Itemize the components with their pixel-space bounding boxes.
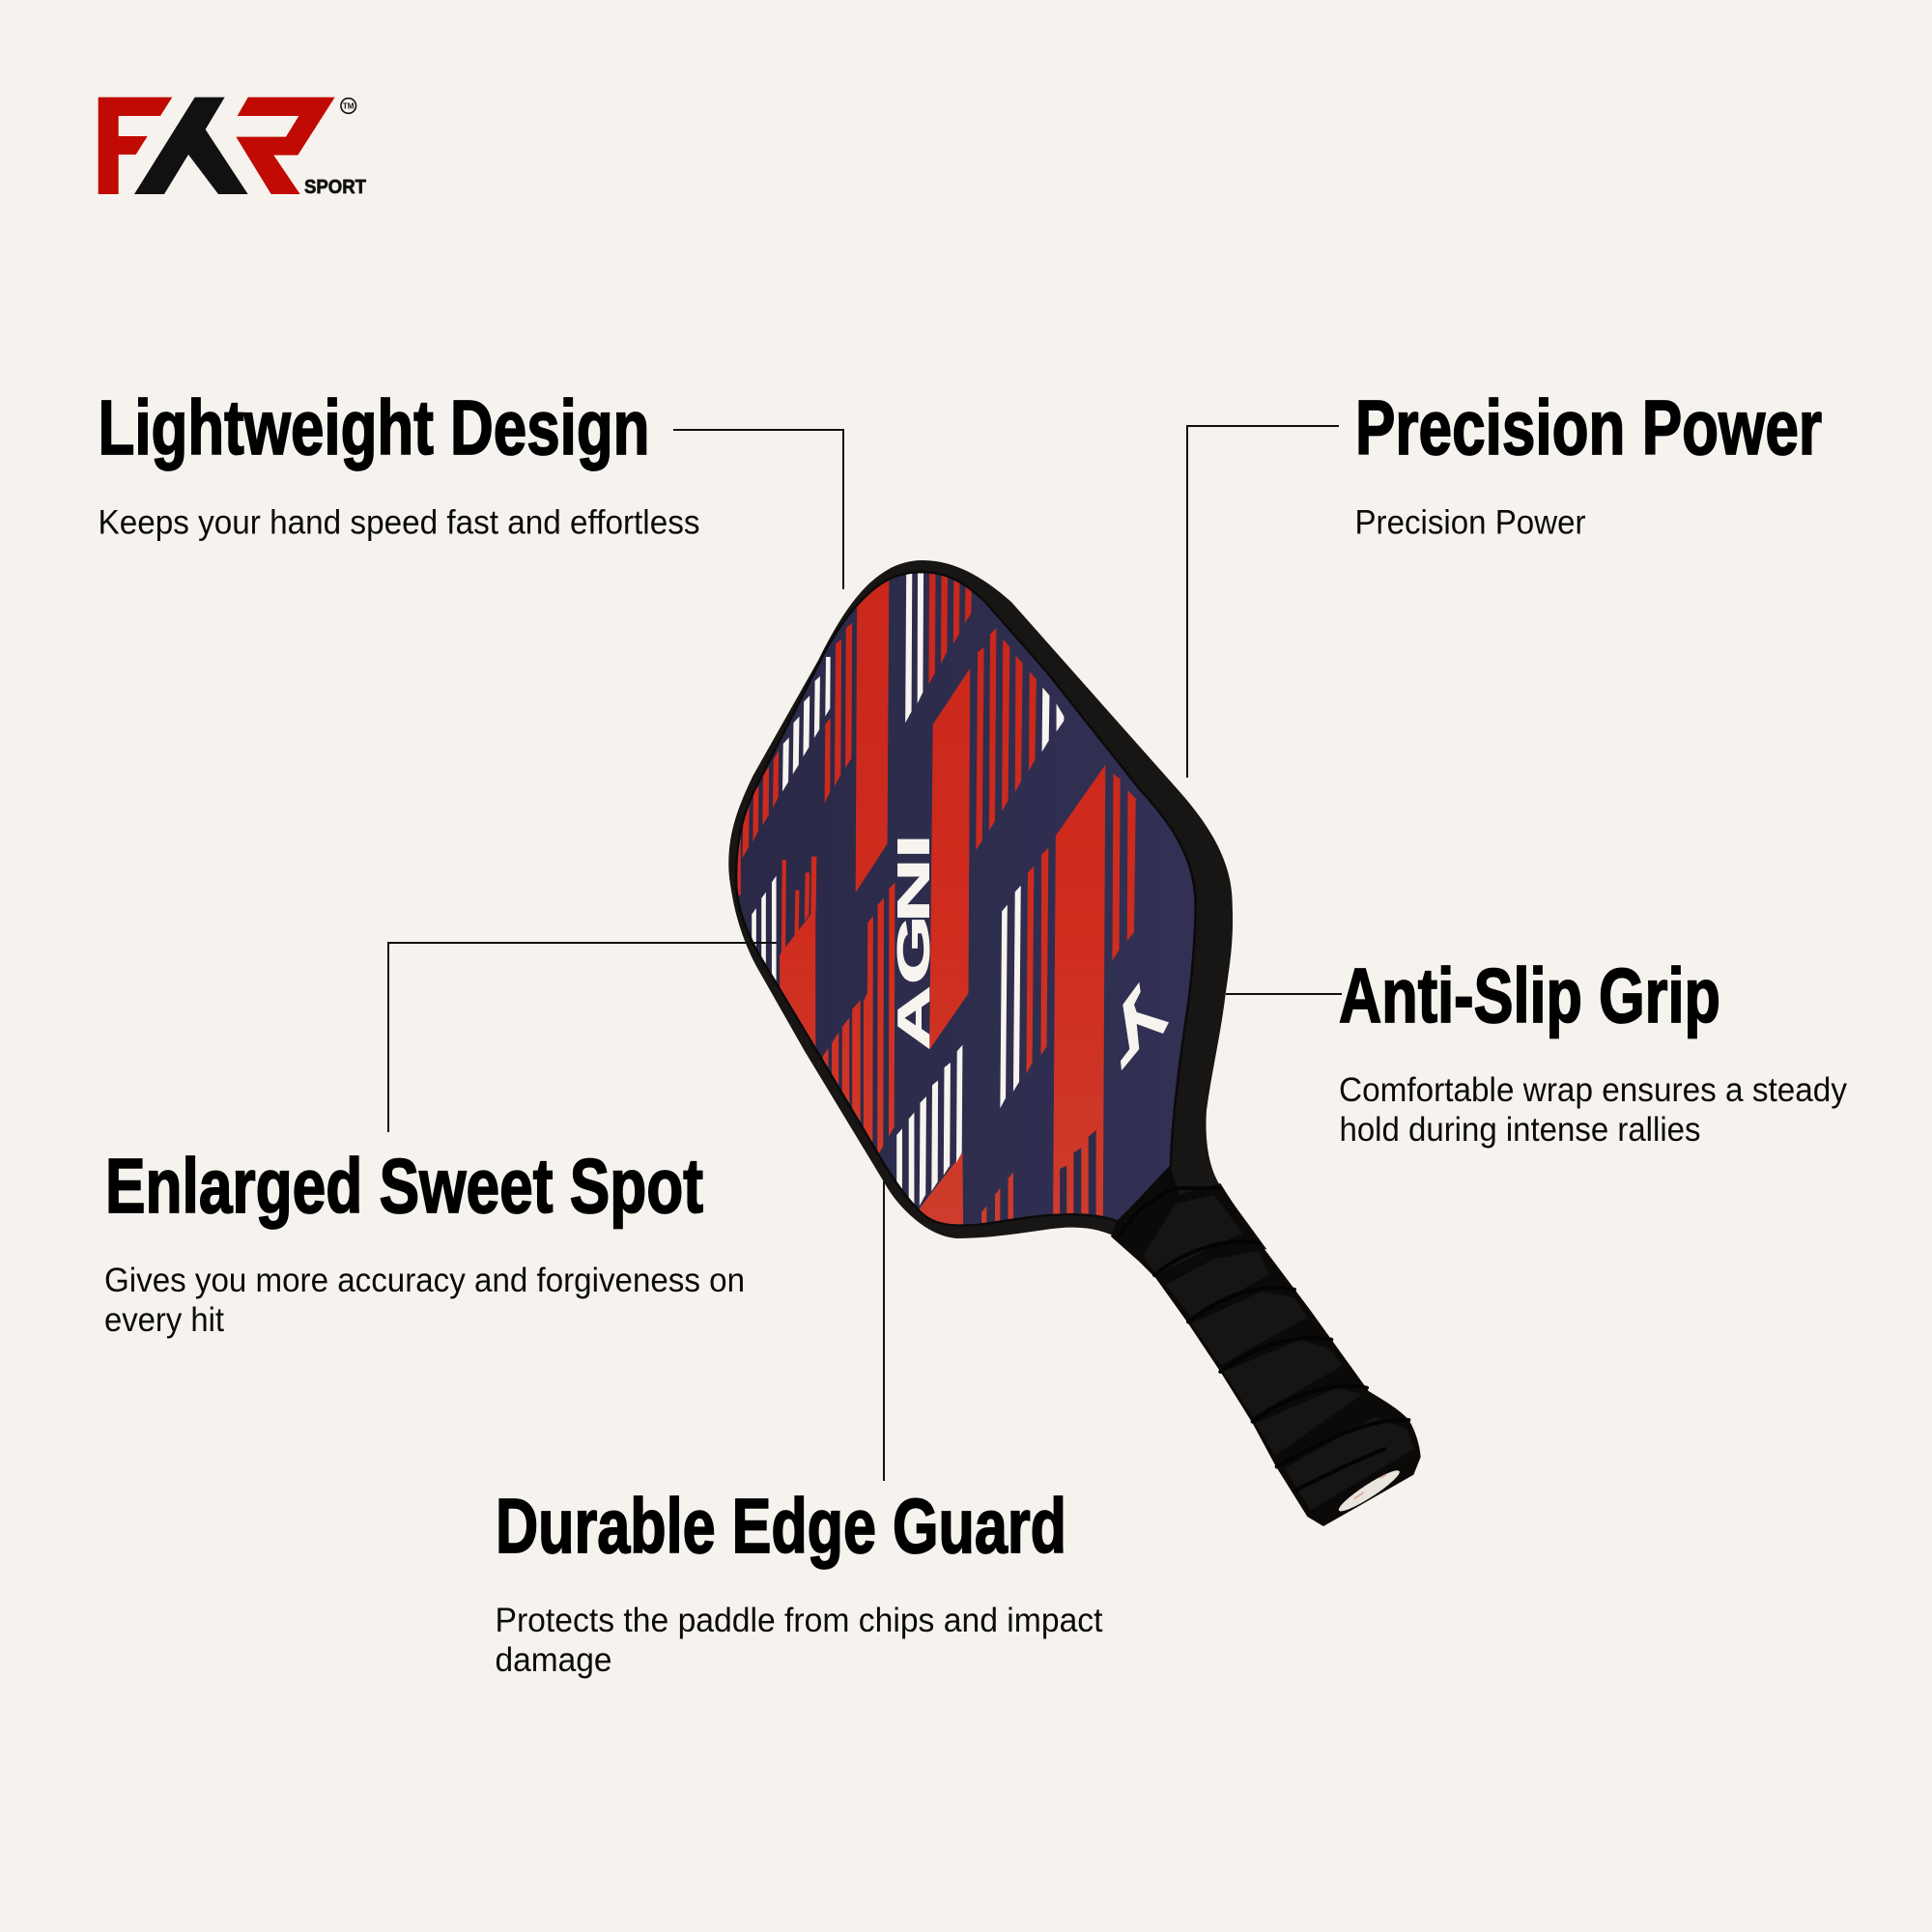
heading: Durable Edge Guard	[496, 1483, 1066, 1569]
leader line	[883, 1181, 885, 1481]
callout: Anti-Slip Grip	[1226, 952, 1847, 1149]
logo letter R	[236, 98, 335, 194]
logo word SPORT: SPORT	[304, 177, 366, 198]
leader line	[673, 430, 843, 589]
description	[495, 1602, 1103, 1679]
logo: FXR Sport	[99, 98, 366, 198]
description: Comfortable wrap ensures a steady	[1339, 1071, 1847, 1109]
description: Gives you more accuracy and forgiveness on	[104, 1262, 745, 1299]
heading: Lightweight Design	[99, 384, 649, 470]
paddle handle with grip wrap	[1111, 1167, 1421, 1526]
description: Precision Power	[1354, 504, 1586, 541]
leader line	[388, 943, 777, 1132]
paddle face graphic	[737, 573, 1194, 1225]
callout: Lightweight Design	[99, 384, 843, 589]
trademark mark	[341, 99, 356, 113]
callout: Enlarged Sweet Spot	[104, 943, 777, 1339]
handle butt cap	[1335, 1465, 1403, 1516]
description: Keeps your hand speed fast and effortless	[99, 504, 699, 541]
paddle body and edge guard	[728, 560, 1266, 1249]
description	[104, 1262, 745, 1339]
callout: Durable Edge Guard	[495, 1181, 1103, 1679]
paddle product illustration	[715, 541, 1421, 1526]
heading: Enlarged Sweet Spot	[105, 1143, 703, 1229]
paddle logo mark	[1121, 982, 1169, 1070]
leader line	[1187, 426, 1339, 778]
logo letter F	[99, 98, 172, 194]
logo letter K	[134, 98, 248, 194]
description: Protects the paddle from chips and impact	[495, 1602, 1103, 1639]
description: damage	[495, 1641, 612, 1679]
description: every hit	[104, 1301, 224, 1339]
callout: Precision Power	[1187, 384, 1822, 778]
paddle brand wordmark AGNI: AGNI	[890, 834, 939, 1050]
leader line	[1226, 993, 1342, 995]
description	[1339, 1071, 1847, 1149]
trademark mark: TM	[343, 102, 355, 110]
heading: Anti-Slip Grip	[1339, 952, 1720, 1038]
description: hold during intense rallies	[1339, 1111, 1700, 1149]
